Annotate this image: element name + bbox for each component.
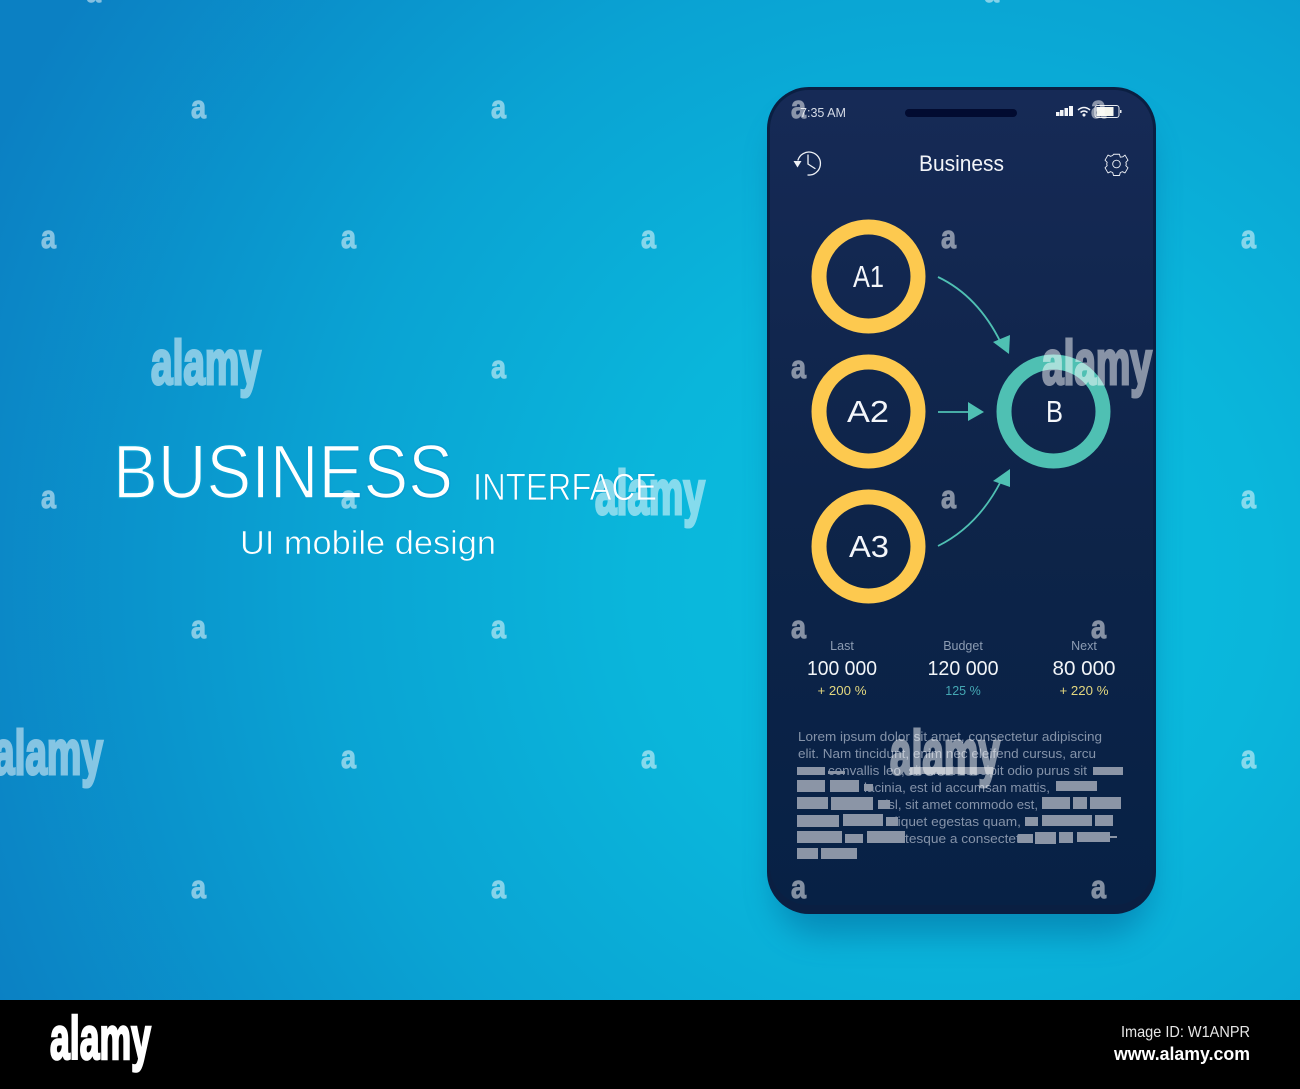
node A1 <box>819 227 918 326</box>
watermarks: a <box>1241 219 1256 255</box>
stat: last: Last <box>830 639 854 653</box>
stat: budget: 125 % <box>945 684 981 698</box>
watermarks: a <box>341 219 356 255</box>
stat: next <box>1052 639 1116 698</box>
stat: last <box>807 639 877 698</box>
watermarks: a <box>1241 479 1256 515</box>
watermarks: a <box>1091 609 1106 645</box>
node B <box>1004 362 1103 461</box>
icon: settings gear <box>1105 154 1128 175</box>
watermarks: a <box>941 479 956 515</box>
watermarks: alamy <box>595 459 705 528</box>
arrow A3 to B <box>938 469 1010 546</box>
watermarks: a <box>1091 89 1106 125</box>
image id: Image ID: W1ANPR <box>1121 1024 1250 1041</box>
time: 7:35 AM <box>800 106 846 120</box>
nav bar <box>794 151 1128 176</box>
website: www.alamy.com <box>1113 1044 1250 1064</box>
stat: last: 100 000 <box>807 657 877 680</box>
watermarks: a <box>941 219 956 255</box>
watermarks: a <box>191 609 206 645</box>
watermarks: a <box>191 869 206 905</box>
node A3 <box>819 497 918 596</box>
title block <box>113 430 657 561</box>
icon: history <box>794 152 820 175</box>
lorem ipsum paragraph: elit. Nam tincidunt, enim nec eleifend cursus, arcu <box>798 746 1096 761</box>
watermarks: a <box>641 219 656 255</box>
flow diagram <box>819 227 1103 596</box>
lorem ipsum paragraph: convallis leo, sit amet suscipit odio purus sit <box>828 763 1087 778</box>
stat: budget: Budget <box>943 639 983 653</box>
footer logo: alamy <box>50 1005 151 1072</box>
watermarks: a <box>41 479 56 515</box>
arrow A2 to B <box>938 402 984 421</box>
stat: next: Next <box>1071 639 1097 653</box>
stat: next: + 220 % <box>1060 684 1108 698</box>
watermarks: a <box>191 89 206 125</box>
battery icon <box>1095 106 1122 118</box>
stat: budget <box>928 639 998 698</box>
title block: UI mobile design <box>240 524 496 561</box>
watermarks: alamy <box>151 329 261 398</box>
lorem ipsum paragraph: Pellentesque a consectetur <box>867 831 1033 846</box>
watermarks: a <box>641 739 656 775</box>
watermarks: a <box>341 479 356 515</box>
watermarks: a <box>1241 739 1256 775</box>
watermarks: a <box>791 349 806 385</box>
stat: last: + 200 % <box>818 684 866 698</box>
title block: BUSINESS <box>113 430 453 515</box>
node B: B <box>1046 394 1063 429</box>
screen heading: Business <box>919 151 1004 176</box>
title block: INTERFACE <box>473 467 657 509</box>
stats <box>807 639 1116 698</box>
lorem ipsum paragraph: nisl, sit amet commodo est, <box>878 797 1038 812</box>
watermarks: alamy <box>1042 329 1152 398</box>
wifi icon <box>1078 108 1090 116</box>
lorem ipsum paragraph: Lorem ipsum dolor sit amet, consectetur adipiscing <box>798 729 1102 744</box>
stat: budget: 120 000 <box>928 657 998 680</box>
lorem ipsum paragraph <box>798 729 1102 846</box>
footer bar <box>0 1000 1300 1089</box>
phone body <box>767 87 1156 914</box>
watermarks: a <box>341 739 356 775</box>
watermarks: a <box>491 869 506 905</box>
lorem ipsum paragraph: aliquet egestas quam, <box>887 814 1021 829</box>
node A3: A3 <box>849 529 889 564</box>
node A2 <box>819 362 918 461</box>
phone <box>767 87 1156 914</box>
redacted bars over paragraph <box>797 767 1123 859</box>
signal icon <box>1056 106 1073 116</box>
lorem ipsum paragraph: lacinia, est id accumsan mattis, <box>864 780 1050 795</box>
node A1: A1 <box>853 259 884 294</box>
status bar <box>800 106 1122 120</box>
phone shadow <box>775 115 1150 935</box>
watermarks: a <box>1091 869 1106 905</box>
speaker notch <box>905 109 1017 117</box>
watermarks: alamy <box>890 719 1000 788</box>
node A2: A2 <box>847 394 889 429</box>
stat: next: 80 000 <box>1052 657 1116 680</box>
arrow A1 to B <box>938 277 1010 354</box>
watermarks: a <box>491 609 506 645</box>
watermarks: a <box>791 89 806 125</box>
watermarks: a <box>791 869 806 905</box>
watermarks: a <box>491 89 506 125</box>
watermarks: a <box>491 349 506 385</box>
watermarks: a <box>791 609 806 645</box>
watermarks: a <box>41 219 56 255</box>
